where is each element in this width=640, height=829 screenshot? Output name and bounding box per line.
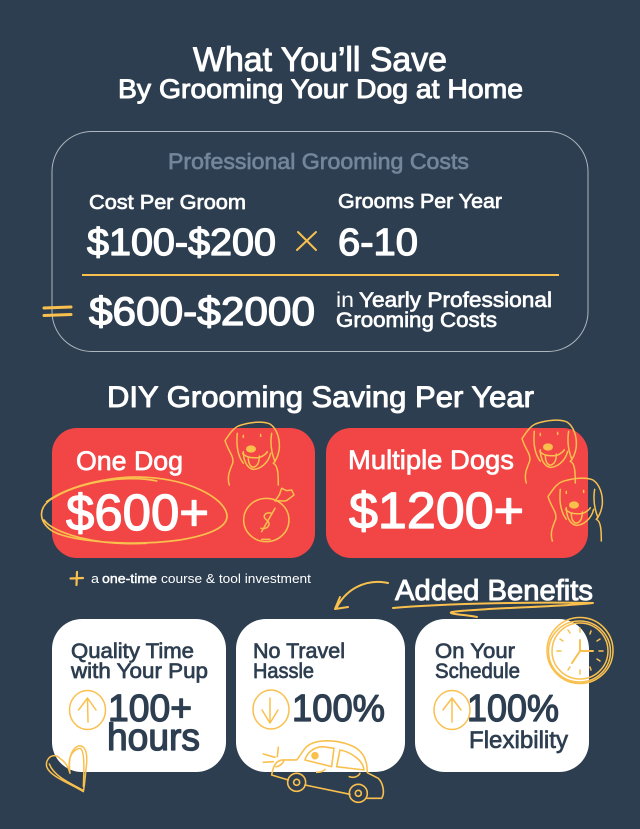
yearly total description: Grooming Costs	[336, 309, 497, 332]
note: one-time investment: course & tool investment	[161, 571, 311, 586]
card heading	[253, 640, 345, 683]
title: By Grooming Your Dog at Home	[118, 74, 523, 104]
icon: down arrow in circle	[253, 690, 289, 729]
panel: one dog	[42, 422, 315, 558]
panel: multiple dogs	[326, 420, 602, 558]
card heading: with Your Pup	[70, 660, 208, 683]
value: multiple dogs saving: $1200+	[349, 482, 524, 539]
note: one-time investment: a	[91, 571, 100, 586]
title	[118, 41, 523, 104]
icon: money bag	[244, 488, 294, 542]
yearly total description	[336, 289, 552, 332]
heading: DIY savings: DIY Grooming Saving Per Year	[107, 381, 534, 414]
icon: up arrow in circle	[434, 690, 470, 730]
icon: car	[263, 741, 383, 802]
panel: professional grooming costs	[44, 132, 588, 352]
value: hours: hours	[107, 717, 200, 759]
icon: clock	[547, 618, 613, 684]
icon: hand-drawn circle around value	[42, 477, 227, 544]
yearly total description: Yearly Professional	[359, 289, 552, 312]
card heading: On Your	[435, 640, 515, 663]
note: one-time investment: one-time	[102, 571, 157, 586]
value: grooms per year: 6-10	[338, 222, 418, 264]
panel: quality time	[52, 619, 226, 772]
value: flexibility: Flexibility	[469, 727, 568, 754]
label: grooms per year: Grooms Per Year	[338, 190, 502, 213]
value: flexibility	[467, 688, 568, 754]
value: yearly total: $600-$2000	[89, 290, 315, 334]
label: cost per groom: Cost Per Groom	[89, 191, 246, 214]
icon: dog one	[522, 420, 576, 483]
card heading: Schedule	[435, 660, 520, 683]
divider line	[82, 274, 559, 276]
panel heading: Professional Grooming Costs	[168, 149, 469, 174]
card heading: Hassle	[253, 660, 314, 683]
panel: no travel hassle	[236, 619, 405, 772]
icon: up arrow in circle	[70, 690, 106, 730]
card heading	[70, 640, 208, 683]
icon: dog two	[548, 478, 602, 541]
card heading: No Travel	[253, 640, 345, 663]
value: hours: 100+	[108, 688, 192, 730]
heading: added benefits: Added Benefits	[395, 575, 593, 607]
value: one dog saving: $600+	[66, 484, 209, 541]
icon: plus	[70, 572, 83, 585]
icon: underline squiggle	[393, 603, 593, 617]
panel: on your schedule	[415, 619, 589, 772]
title: What You’ll Save	[193, 41, 447, 79]
value: cost per groom: $100-$200	[87, 222, 276, 264]
icon: heart	[46, 746, 87, 792]
value: flexibility: 100%	[467, 688, 559, 730]
icon: dog	[225, 422, 279, 485]
icon: equals sign	[44, 307, 71, 316]
yearly total description: in	[336, 289, 354, 312]
icon: multiply sign	[297, 232, 316, 250]
value: 100 percent: 100%	[292, 688, 385, 730]
value: hours	[107, 688, 200, 759]
arrow: pointing to cards	[335, 582, 388, 609]
label: multiple dogs: Multiple Dogs	[348, 445, 514, 475]
card heading: Quality Time	[71, 640, 194, 663]
card heading	[435, 640, 520, 683]
label: one dog: One Dog	[76, 446, 183, 476]
note: one-time investment	[70, 571, 311, 586]
